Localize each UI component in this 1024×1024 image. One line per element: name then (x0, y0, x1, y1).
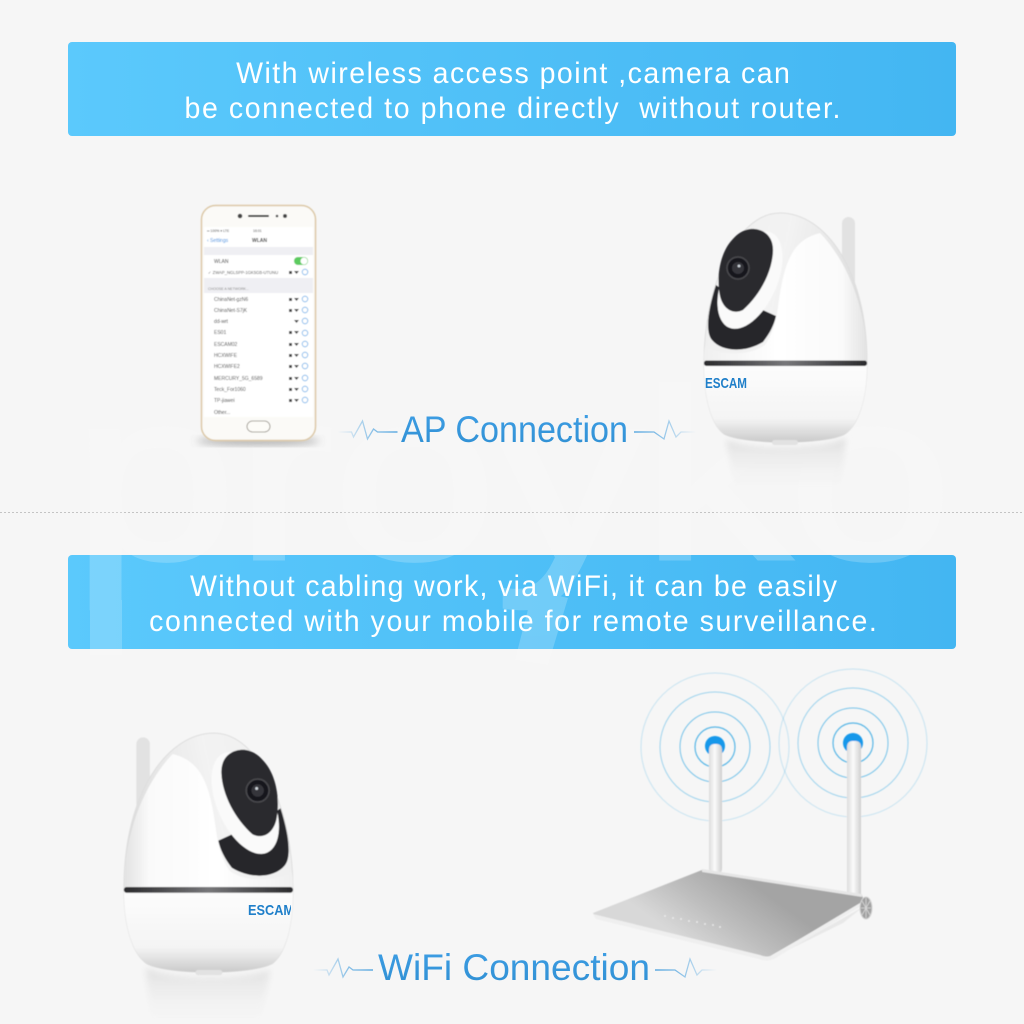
heading: AP Connection: AP Connection (401, 409, 628, 450)
lower banner (68, 555, 956, 649)
icon: smartphone with WLAN list: ES01 (214, 330, 226, 336)
icon: smartphone with WLAN list: ESCAM02 (214, 342, 238, 348)
icon: smartphone with WLAN list: HCXWIFE (214, 353, 238, 359)
icon: pulse right of WiFi Connection (655, 959, 717, 977)
icon: smartphone with WLAN list: ChinaNet-S7jK (214, 308, 248, 314)
icon: smartphone with WLAN list: CHOOSE A NETWORK... (208, 287, 249, 291)
icon: smartphone with WLAN list: ✓ ZWAP_NGLSPP-1GK5GB-UTUNU (208, 270, 278, 275)
icon: smartphone with WLAN list: 16:01 (253, 229, 262, 233)
icon: router with two antennas and signal rings (593, 669, 927, 960)
icon: smartphone with WLAN list: ‹ Settings (207, 238, 229, 244)
icon: smartphone with WLAN list: •• 100% ▾ LTE (207, 229, 230, 233)
icon: smartphone with WLAN list: Teck_For1060 (214, 387, 246, 393)
camera: AP connection (704, 213, 867, 496)
icon: smartphone with WLAN list (196, 206, 320, 445)
icon: smartphone with WLAN list: dd-wrt (214, 319, 229, 325)
top banner: With wireless access point ,camera can (236, 57, 790, 90)
watermark: proyko (73, 341, 952, 610)
icon: pulse left of WiFi Connection (313, 959, 373, 977)
camera logo: WiFi connection: ESCAM (248, 902, 294, 919)
top banner: be connected to phone directly without router. (185, 92, 840, 125)
lower banner: Without cabling work, via WiFi, it can be easily (190, 570, 837, 603)
top banner (68, 42, 956, 136)
camera: WiFi connection (124, 733, 293, 1024)
icon: smartphone with WLAN list: HCXWIFE2 (214, 364, 240, 370)
section divider (0, 512, 1024, 514)
icon: pulse left of AP Connection (338, 421, 398, 439)
icon: smartphone with WLAN list: WLAN (214, 259, 229, 265)
icon: smartphone with WLAN list: WLAN (252, 238, 267, 244)
camera logo: AP connection: ESCAM (705, 375, 747, 392)
lower banner: connected with your mobile for remote surveillance. (149, 605, 877, 638)
icon: smartphone with WLAN list: ChinaNet-gzN6 (214, 297, 248, 303)
icon: smartphone with WLAN list: TP-jiawei (214, 398, 235, 404)
icon: pulse right of AP Connection (634, 421, 696, 439)
icon: smartphone with WLAN list: Other... (214, 410, 230, 416)
icon: smartphone with WLAN list: MERCURY_5G_6589 (214, 376, 263, 382)
heading: WiFi Connection: WiFi Connection (378, 946, 650, 988)
